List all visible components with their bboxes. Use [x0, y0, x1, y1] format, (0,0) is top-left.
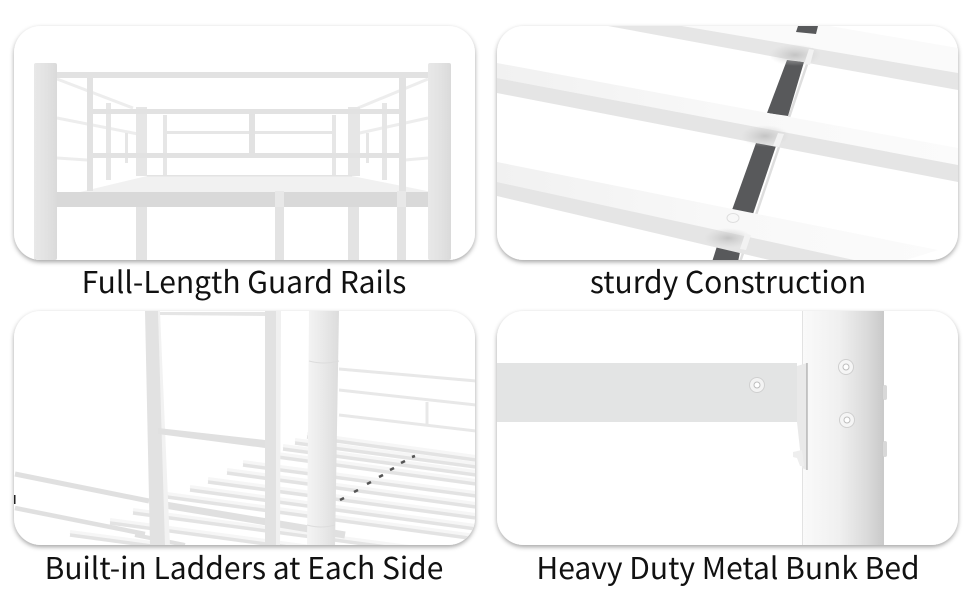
centre support beam: [712, 60, 804, 262]
deck slats: [70, 436, 475, 545]
corner posts: [34, 63, 57, 260]
beam: [497, 363, 797, 422]
post: [814, 311, 884, 545]
legs: [136, 207, 406, 260]
post bolt bottom: [840, 412, 854, 428]
post: [307, 311, 339, 546]
heading: Full-Length Guard Rails: Full-Length Guard Rails: [82, 258, 406, 302]
side bolts: [883, 385, 887, 400]
bracket: [797, 363, 807, 470]
heading: sturdy Construction: sturdy Construction: [590, 258, 866, 302]
post bolt top: [838, 360, 854, 374]
mattress deck: [80, 176, 432, 192]
beam crossing strips: [740, 49, 814, 250]
deck slat top faces: [70, 434, 475, 545]
beam top segment: [796, 26, 818, 34]
heading: Built-in Ladders at Each Side: Built-in Ladders at Each Side: [45, 544, 443, 588]
panel: sturdy construction: [497, 26, 958, 262]
joint shadows: [775, 48, 808, 65]
heading: Heavy Duty Metal Bunk Bed: Heavy Duty Metal Bunk Bed: [536, 544, 920, 588]
side rails in perspective: [57, 79, 428, 160]
near guard rail: [57, 72, 428, 191]
edge tick: [14, 495, 16, 504]
main beam: [55, 192, 430, 207]
beam bolt: [750, 378, 764, 392]
slat: bottom: [497, 162, 758, 235]
rivet: [727, 214, 739, 222]
front side rails: [15, 474, 345, 545]
back guard rails: [339, 369, 476, 431]
slat support ticks: [340, 456, 415, 500]
beam edge highlight: [740, 64, 808, 260]
ladder: [145, 311, 281, 546]
far guard rail: [106, 103, 387, 180]
hook: [793, 450, 802, 466]
panel: heavy duty metal: [497, 311, 958, 546]
panel: built-in ladders: [14, 311, 476, 566]
slat: middle: [497, 63, 790, 132]
slat: top: [812, 26, 821, 48]
panel: full-length guard rails: [14, 26, 475, 260]
